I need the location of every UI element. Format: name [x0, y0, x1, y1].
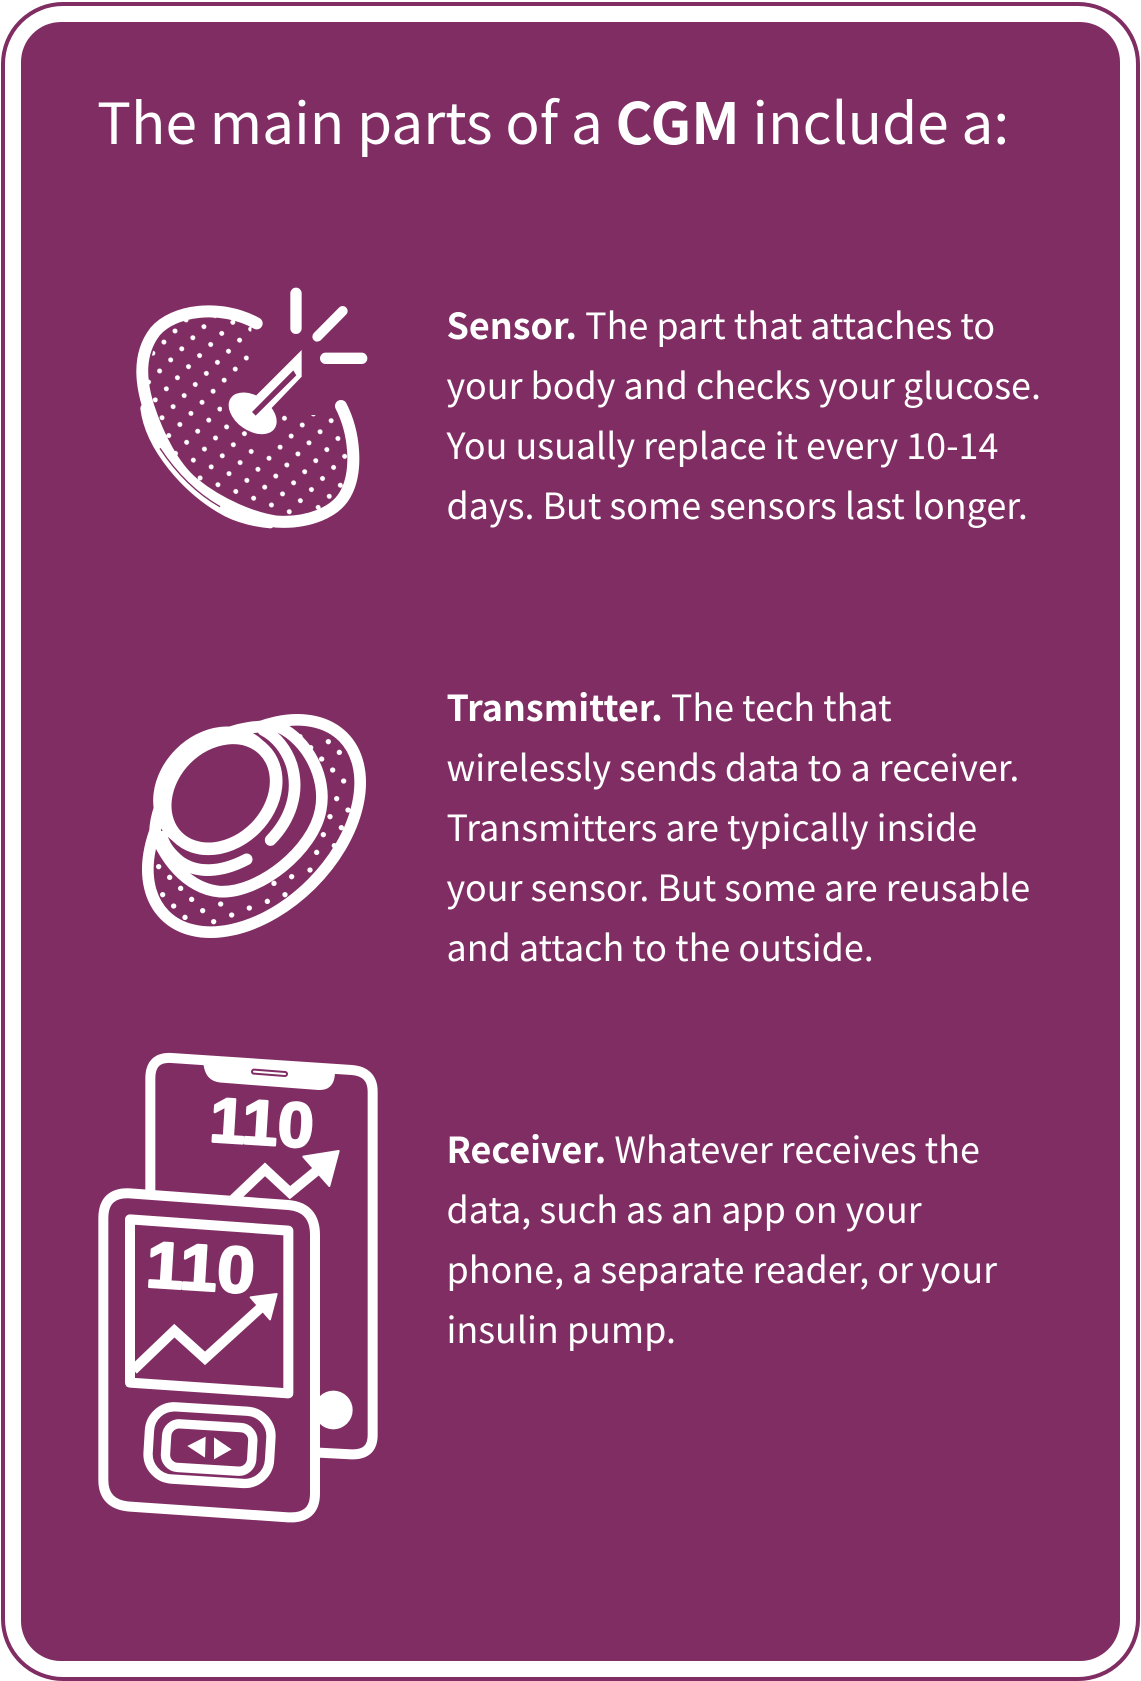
text block: sensor: You usually replace it every 10-14 — [446, 418, 998, 470]
phone notch — [203, 1063, 335, 1090]
transmitter body — [155, 727, 322, 892]
phone trend arrow — [233, 1169, 318, 1199]
sensor dotted surface — [148, 317, 348, 520]
text block: transmitter: Transmitter. The tech that — [446, 680, 892, 732]
text block: sensor — [446, 298, 1041, 530]
reader reading: 110 — [144, 1228, 257, 1307]
text block: receiver: insulin pump. — [446, 1302, 676, 1354]
phone reading: 110 — [208, 1085, 316, 1162]
text block: receiver — [446, 1122, 998, 1354]
sensor hub — [221, 384, 284, 443]
text block: receiver: phone, a separate reader, or your — [446, 1242, 997, 1294]
icon: transmitter — [107, 679, 401, 973]
transmitter inner arcs — [263, 730, 295, 840]
transmitter ring backing — [137, 710, 293, 866]
text block: transmitter: Transmitters are typically inside — [446, 800, 977, 852]
reader trend arrow — [133, 1308, 260, 1370]
reader button — [147, 1405, 272, 1485]
reader button arrows — [187, 1437, 206, 1458]
phone home button — [314, 1391, 353, 1429]
text block: receiver: data, such as an app on your — [446, 1182, 922, 1234]
sensor disc underside — [145, 408, 270, 523]
text block: transmitter: wirelessly sends data to a receiver. — [446, 740, 1019, 792]
icon: receiver — [103, 1058, 373, 1517]
reader body — [103, 1193, 315, 1517]
text block: sensor: days. But some sensors last longer. — [446, 478, 1028, 530]
sensor signal rays — [296, 293, 362, 358]
text block: transmitter: your sensor. But some are reusable — [446, 860, 1030, 912]
phone body — [150, 1058, 373, 1454]
text block: sensor: your body and checks your glucose. — [446, 358, 1041, 410]
icon: sensor — [142, 293, 362, 523]
sensor needle — [248, 350, 302, 417]
text block: transmitter — [446, 680, 1030, 972]
text block: sensor: Sensor. The part that attaches to — [446, 298, 995, 350]
sensor disc outline — [142, 311, 353, 522]
reader screen — [130, 1219, 288, 1393]
text block: receiver: Receiver. Whatever receives the — [446, 1122, 980, 1174]
text block: transmitter: and attach to the outside. — [446, 920, 874, 972]
title: The main parts of a CGM include a: — [97, 79, 1009, 161]
transmitter dots — [156, 734, 351, 924]
transmitter base disc — [107, 679, 401, 973]
transmitter top ring — [143, 715, 299, 871]
